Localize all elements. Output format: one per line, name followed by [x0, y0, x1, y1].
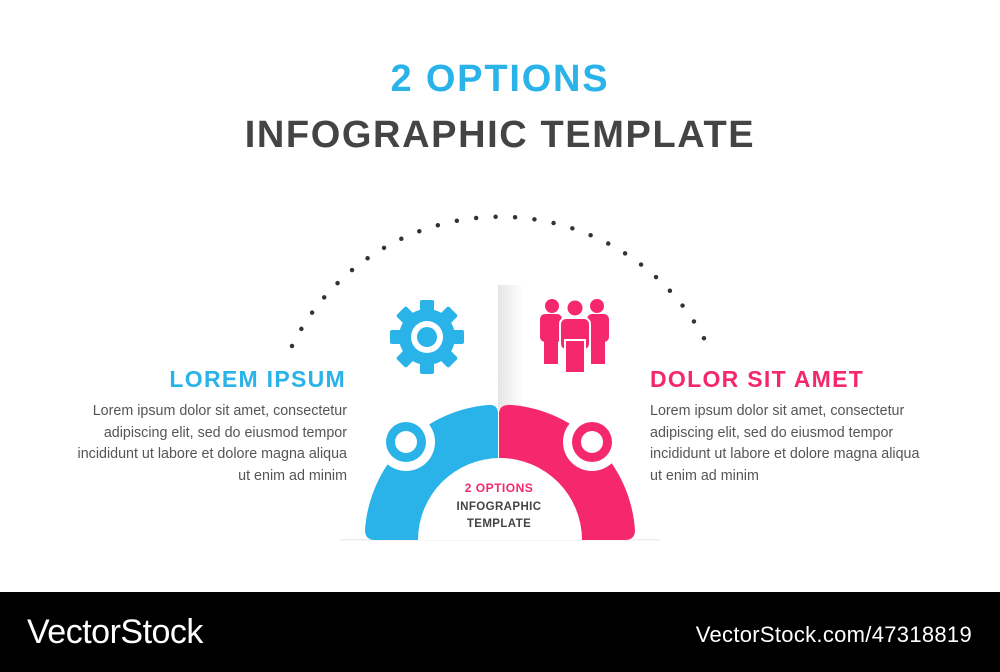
- footer bar: [0, 592, 1000, 672]
- left text block: LOREM IPSUM: [169, 366, 346, 392]
- dotted arc: [292, 217, 708, 346]
- baseline: [340, 539, 660, 540]
- right text block: incididunt ut labore et dolore magna aliqua: [650, 446, 919, 462]
- center label: [418, 458, 582, 540]
- right text block: ut enim ad minim: [650, 468, 759, 484]
- center label: TEMPLATE: [467, 518, 531, 530]
- footer bar: VectorStock.com/47318819: [696, 622, 972, 647]
- title: INFOGRAPHIC TEMPLATE: [245, 114, 755, 156]
- left text block: Lorem ipsum dolor sit amet, consectetur: [93, 403, 347, 419]
- panel shadow fold: [498, 285, 524, 410]
- left text block: [78, 366, 347, 484]
- right text block: Lorem ipsum dolor sit amet, consectetur: [650, 403, 905, 419]
- icon: people: [540, 299, 609, 373]
- right text block: adipiscing elit, sed do eiusmod tempor: [650, 425, 893, 441]
- center label: 2 OPTIONS: [465, 481, 533, 495]
- title: [245, 58, 755, 156]
- left text block: adipiscing elit, sed do eiusmod tempor: [104, 425, 347, 441]
- title: 2 OPTIONS: [391, 58, 609, 100]
- footer bar: VectorStock: [27, 613, 204, 651]
- icon: gear: [390, 300, 464, 374]
- right text block: [650, 366, 919, 484]
- right option segment: [499, 405, 635, 540]
- right text block: DOLOR SIT AMET: [650, 366, 864, 392]
- left text block: ut enim ad minim: [238, 468, 347, 484]
- left text block: incididunt ut labore et dolore magna aliqua: [78, 446, 347, 462]
- center label: INFOGRAPHIC: [457, 501, 541, 513]
- left option segment: [365, 405, 498, 540]
